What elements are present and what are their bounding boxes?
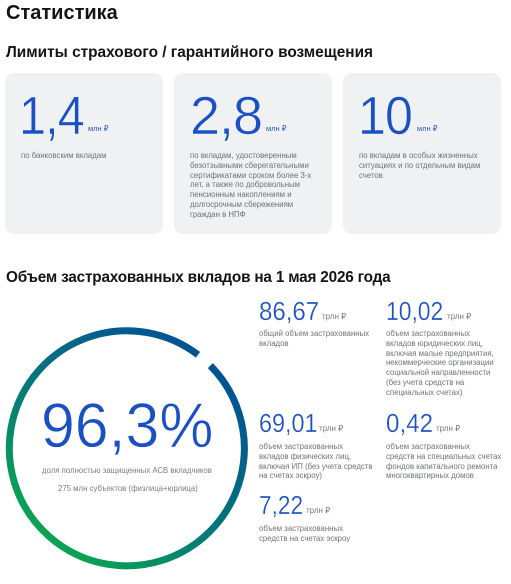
value 10: 10 bbox=[358, 86, 412, 146]
description: вкладов юридических лиц, bbox=[386, 339, 483, 348]
value 96,3%: 96,3% bbox=[41, 391, 213, 461]
ring caption: доля полностью защищенных АСВ вкладчиков bbox=[42, 466, 212, 475]
stat 86,67 bbox=[259, 296, 369, 348]
description: включая малые предприятия, bbox=[386, 348, 494, 358]
unit: млн ₽ bbox=[417, 124, 438, 133]
stat 69,01 bbox=[259, 408, 372, 480]
stat 7,22 bbox=[259, 490, 350, 543]
description: объем застрахованных bbox=[259, 524, 343, 533]
description: общий объем застрахованных bbox=[259, 329, 369, 338]
description bbox=[190, 151, 312, 218]
description: по вкладам, удостоверенным bbox=[190, 151, 297, 160]
value 2,8: 2,8 bbox=[190, 86, 262, 146]
description: вкладов физических лиц, bbox=[259, 452, 351, 461]
description: включая ИП (без учета средств bbox=[259, 462, 372, 470]
description: сертификатами сроком более 3-х bbox=[190, 170, 311, 180]
value: 0,42 bbox=[386, 408, 433, 438]
unit: млн ₽ bbox=[266, 124, 287, 133]
value 1,4: 1,4 bbox=[19, 86, 84, 146]
stat 10,02 bbox=[386, 296, 494, 396]
description: специальных счетах) bbox=[386, 388, 462, 396]
description bbox=[386, 329, 494, 396]
description: (без учета средств на bbox=[386, 378, 464, 387]
description: на счетах эскроу) bbox=[259, 471, 322, 480]
description: средств на счетах эскроу bbox=[259, 534, 350, 543]
description: объем застрахованных bbox=[386, 329, 470, 338]
panel: limit 2,8 bbox=[174, 73, 332, 234]
description: по вкладам в особых жизненных bbox=[359, 151, 478, 160]
description bbox=[259, 524, 350, 543]
value: 69,01 bbox=[259, 408, 318, 438]
description: ситуациях и по отдельным видам bbox=[359, 161, 480, 170]
description: вкладов bbox=[259, 339, 289, 348]
description bbox=[259, 329, 369, 348]
description bbox=[259, 442, 372, 480]
unit: трлн ₽ bbox=[436, 424, 460, 433]
unit: трлн ₽ bbox=[306, 506, 330, 515]
value: 10,02 bbox=[386, 296, 443, 326]
description: объем застрахованных bbox=[386, 442, 470, 451]
panel: limit 1,4 bbox=[5, 73, 163, 234]
heading: insured deposits: Объем застрахованных вкладов на 1 мая 2026 года bbox=[6, 269, 390, 286]
description: средств на специальных счетах bbox=[386, 452, 501, 461]
description: социальной направленности bbox=[386, 368, 490, 377]
description: объем застрахованных bbox=[259, 442, 343, 451]
description: некоммерческие организации bbox=[386, 358, 494, 367]
ring sub-caption: 275 млн субъектов (физлица+юрлица) bbox=[58, 484, 198, 493]
description: счетов bbox=[359, 170, 383, 180]
unit: трлн ₽ bbox=[319, 424, 343, 433]
unit: трлн ₽ bbox=[322, 312, 346, 321]
heading: limits: Лимиты страхового / гарантийного возмещения bbox=[6, 44, 373, 61]
description bbox=[359, 151, 480, 180]
description: многоквартирных домов bbox=[386, 471, 474, 480]
chart: ring 96,3% bbox=[6, 327, 248, 570]
title: Статистика bbox=[6, 2, 118, 24]
value: 7,22 bbox=[259, 490, 303, 520]
description: лет, а также по добровольным bbox=[190, 180, 300, 189]
description: граждан в НПФ bbox=[190, 210, 246, 218]
description: по банковским вкладам bbox=[21, 151, 107, 160]
description: фондов капитального ремонта bbox=[386, 462, 498, 470]
unit: млн ₽ bbox=[88, 124, 109, 133]
panel: limit 10 bbox=[343, 73, 501, 234]
value: 86,67 bbox=[259, 296, 319, 326]
description: долгосрочным сбережениям bbox=[190, 200, 293, 209]
description bbox=[386, 442, 502, 480]
description: безотзывными сберегательными bbox=[190, 161, 309, 170]
description: пенсионным накоплениям и bbox=[190, 190, 292, 199]
unit: трлн ₽ bbox=[447, 312, 471, 321]
stat 0,42 bbox=[386, 408, 502, 480]
